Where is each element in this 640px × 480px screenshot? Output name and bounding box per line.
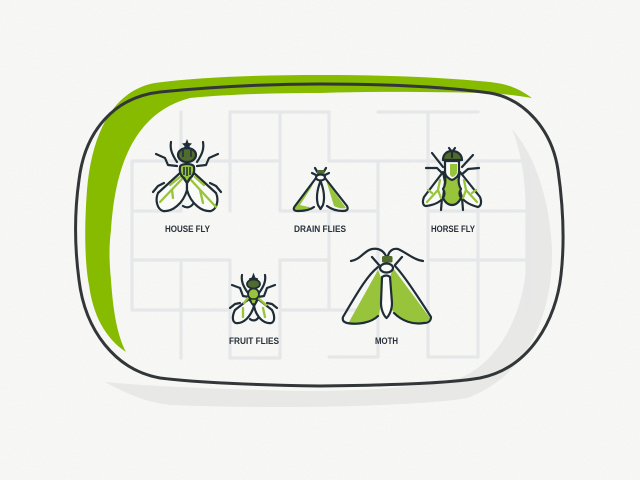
drop shadow of the tray (105, 129, 552, 407)
green brush swoosh (85, 75, 532, 352)
icon: horse fly (423, 148, 481, 210)
label: moth: MOTH (375, 336, 398, 346)
tray outline (76, 84, 563, 386)
label: drain flies: DRAIN FLIES (294, 224, 346, 234)
label: house fly: HOUSE FLY (165, 224, 210, 234)
icon: house fly (153, 139, 221, 211)
icon: fruit flies (230, 274, 277, 323)
label: fruit flies: FRUIT FLIES (229, 336, 279, 346)
icon: moth (343, 249, 431, 324)
icon: drain flies (294, 168, 348, 211)
background maze grid (132, 112, 527, 358)
label: horse fly: HORSE FLY (431, 224, 475, 234)
